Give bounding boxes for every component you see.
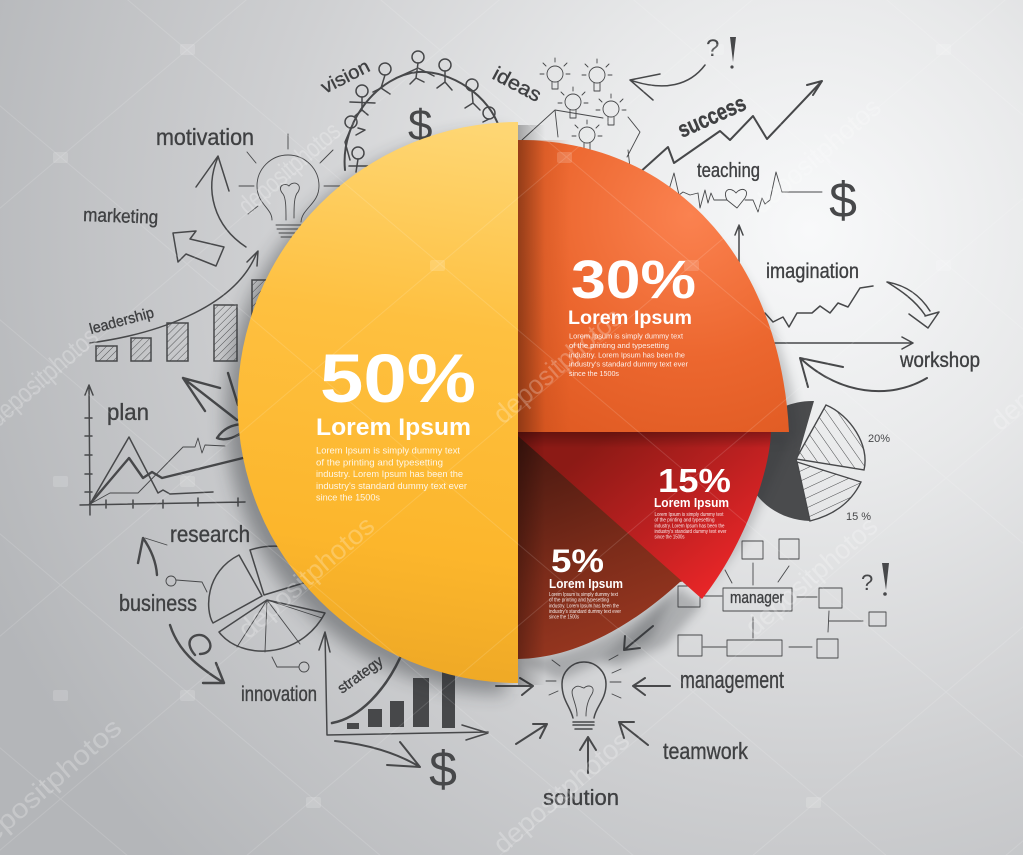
sketch: leadership rising bars: leadership — [88, 304, 156, 338]
sketch: research — [138, 521, 250, 575]
text block: 5% description: industry. Lorem Ipsum has been the — [549, 603, 619, 609]
text block: 15% description: industry's standard dummy text ever — [654, 529, 727, 535]
sketch: leadership rising bars — [88, 251, 272, 361]
label: 15% heading: Lorem Ipsum — [654, 495, 729, 510]
sketch: marketing: marketing — [83, 205, 159, 229]
sketch: ideas: ideas — [489, 63, 545, 107]
text block: 15% description: Lorem Ipsum is simply dummy text — [654, 512, 724, 518]
text block: 50% description: of the printing and typesetting — [316, 457, 443, 467]
sketch: workshop — [775, 337, 980, 391]
sketch: curved arrow with question and exclamation marks: ? — [706, 35, 719, 62]
sketch: motivation: motivation — [156, 124, 254, 150]
sketch: imagination — [735, 225, 939, 328]
chart: plan line sketch: plan — [107, 399, 149, 425]
shadows under the pie — [226, 133, 799, 694]
text block: 30% description — [569, 332, 688, 378]
watermarks: depositphotos — [746, 92, 887, 220]
watermarks: depositphotos — [487, 302, 628, 430]
chart: manager org chart: manager — [730, 588, 784, 607]
text block: 5% description — [549, 592, 621, 621]
sketch: curved arrow with question and exclamation marks — [630, 35, 736, 100]
sketch: people chain with vision label: vision — [318, 56, 374, 98]
text block: 15% description: industry. Lorem Ipsum has been the — [654, 523, 725, 529]
sketch: motivation — [156, 124, 254, 247]
text block: 30% description: industry. Lorem Ipsum has been the — [569, 350, 685, 359]
sketch: teaching with pulse: teaching — [697, 160, 760, 182]
label: 30%: 30% — [571, 250, 696, 310]
chart: hatched pie on the right — [745, 401, 890, 523]
sketch: business — [119, 576, 224, 683]
text block: 50% description: since the 1500s — [316, 493, 380, 503]
panel: 15% slice — [518, 432, 771, 599]
watermarks: depositphotos — [232, 510, 380, 645]
panel: 5% slice — [518, 428, 690, 659]
chart: hatched pie on the right: 15 % — [846, 511, 871, 523]
sketch: innovation: innovation — [241, 683, 317, 706]
text block: 15% description — [654, 512, 727, 540]
text block: 30% description: of the printing and typesetting — [569, 341, 669, 350]
label: 5% heading: Lorem Ipsum — [549, 576, 623, 591]
text block: 15% description: of the printing and typesetting — [654, 518, 715, 524]
chart: hatched pie on the right: 20% — [868, 433, 890, 445]
sketch: teamwork: teamwork — [663, 738, 748, 764]
watermarks: depositphotos — [232, 116, 346, 221]
text block: 30% description: Lorem Ipsum is simply dummy text — [569, 332, 684, 340]
text block: 30% description: since the 1500s — [569, 369, 619, 378]
text block: 50% description: Lorem Ipsum is simply dummy text — [316, 446, 460, 456]
sketch: marketing — [83, 205, 224, 266]
text block: 15% description: since the 1500s — [654, 534, 685, 540]
text block: 5% description: since the 1500s — [549, 615, 579, 621]
text block: 5% description: Lorem Ipsum is simply dummy text — [549, 592, 619, 598]
label: 50% heading: Lorem Ipsum — [316, 414, 471, 441]
icon: solution lightbulb with arrows — [496, 626, 670, 773]
sketch: pie chart left — [209, 546, 330, 672]
sketch: success arrow — [638, 81, 822, 174]
label: 5%: 5% — [551, 543, 604, 579]
text block: 50% description — [316, 446, 467, 503]
sketch: people chain with vision label — [318, 51, 500, 172]
chart: plan line sketch — [80, 373, 245, 515]
chart: strategy bars: strategy — [334, 653, 387, 697]
icon: large lightbulb — [239, 134, 340, 237]
panel: 50% half circle — [238, 122, 546, 685]
chart: manager org chart: ? — [861, 570, 873, 595]
label: 15%: 15% — [658, 462, 731, 499]
panel: 30% slice — [518, 140, 789, 432]
text block: 50% description: industry. Lorem Ipsum has been the — [316, 469, 463, 479]
watermarks: depositphotos — [739, 511, 883, 642]
chart: manager org chart — [678, 539, 889, 658]
sketch: research: research — [170, 521, 250, 547]
text block: 50% description: industry's standard dummy text ever — [316, 481, 467, 491]
icon: dollar right: $ — [829, 172, 857, 228]
text block: 30% description: industry's standard dummy text ever — [569, 360, 688, 369]
sketch: solution: solution — [543, 785, 619, 810]
icon: dollar bottom: $ — [429, 741, 457, 797]
label: 50%: 50% — [320, 340, 476, 417]
label: 30% heading: Lorem Ipsum — [568, 308, 692, 329]
sketch: workshop: workshop — [899, 349, 980, 372]
text block: 5% description: industry's standard dummy text ever — [549, 609, 621, 615]
chart: strategy bars — [319, 632, 488, 767]
text block: 5% description: of the printing and typesetting — [549, 598, 609, 604]
sketch: people chain with vision label: $ — [408, 101, 432, 150]
icon: small lightbulbs and box — [522, 58, 640, 168]
sketch: teaching with pulse — [663, 160, 822, 212]
sketch: success arrow: success — [673, 90, 750, 143]
sketch: business: business — [119, 590, 197, 616]
sketch: management: management — [680, 667, 784, 694]
sketch: imagination: imagination — [766, 260, 859, 283]
